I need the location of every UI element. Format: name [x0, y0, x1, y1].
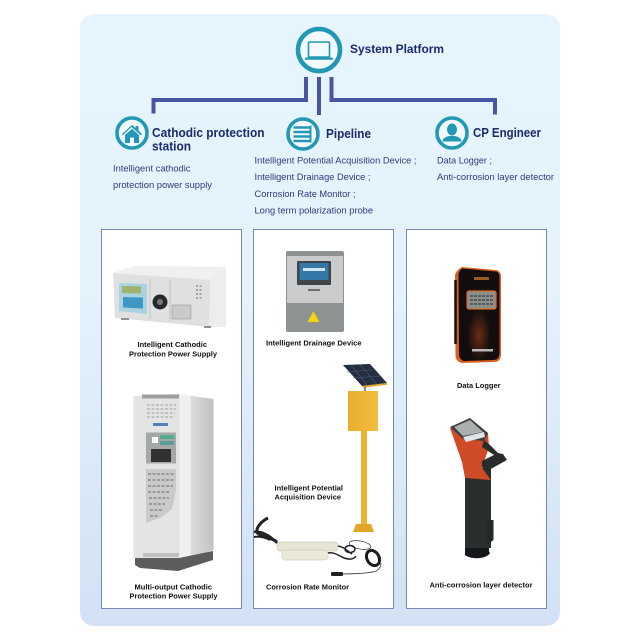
label: intelligent cathodic protection power supply: Protection Power Supply [129, 350, 218, 358]
product: intelligent potential acquisition device [343, 364, 387, 532]
label: intelligent potential acquisition device: Acquisition Device [274, 492, 341, 502]
text: engineer devices: Anti-corrosion layer detector [437, 172, 554, 183]
text: pipeline devices: Intelligent Potential Acquisition Device ; [254, 156, 416, 166]
icon: cathodic protection station house [117, 118, 147, 148]
label: data logger: Data Logger [457, 381, 501, 390]
text: station devices: Intelligent cathodic [113, 164, 191, 174]
label: corrosion rate monitor: Corrosion Rate Monitor [266, 582, 349, 592]
text: pipeline devices: Intelligent Drainage Device ; [254, 172, 370, 183]
heading: system platform: System Platform [350, 42, 444, 56]
product: corrosion rate monitor [254, 518, 382, 576]
label: intelligent drainage device: Intelligent Drainage Device [266, 338, 362, 348]
label: multi-output cathodic protection power supply: Multi-output Cathodic [134, 582, 212, 592]
label: intelligent cathodic protection power supply: Intelligent Cathodic [138, 340, 207, 349]
text: engineer devices: Data Logger ; [437, 156, 492, 166]
label: intelligent potential acquisition device [274, 484, 343, 502]
text: pipeline devices [254, 156, 416, 216]
icon: pipeline [288, 119, 318, 149]
panel: pipeline products [254, 230, 394, 608]
product: multi-output cathodic protection power supply [134, 394, 214, 571]
connector lines [154, 77, 495, 115]
heading: cathodic protection station: Cathodic protection [152, 125, 265, 140]
icon: cp engineer person [437, 118, 467, 148]
label: multi-output cathodic protection power supply [130, 582, 218, 600]
label: multi-output cathodic protection power supply: Protection Power Supply [130, 592, 218, 600]
text: pipeline devices: Long term polarization probe [254, 206, 373, 216]
product: data logger [455, 267, 501, 363]
text: station devices [113, 164, 212, 191]
heading line two: station: station [152, 138, 191, 154]
label: anti-corrosion layer detector: Anti-corrosion layer detector [430, 580, 533, 590]
product: anti-corrosion layer detector [450, 418, 507, 558]
panel: engineer products [406, 230, 546, 608]
panel: station products [102, 230, 242, 608]
text: station devices: protection power supply [113, 180, 212, 191]
product: intelligent cathodic protection power supply [113, 266, 226, 328]
icon: system platform laptop [298, 29, 340, 71]
heading: pipeline: Pipeline [326, 126, 371, 141]
label: intelligent potential acquisition device: Intelligent Potential [274, 484, 343, 492]
text: pipeline devices: Corrosion Rate Monitor ; [254, 189, 356, 200]
text: engineer devices [437, 156, 554, 183]
heading: cp engineer: CP Engineer [473, 125, 541, 140]
label: intelligent cathodic protection power supply [129, 340, 218, 358]
background panel [80, 14, 560, 626]
product: intelligent drainage device [286, 251, 344, 332]
